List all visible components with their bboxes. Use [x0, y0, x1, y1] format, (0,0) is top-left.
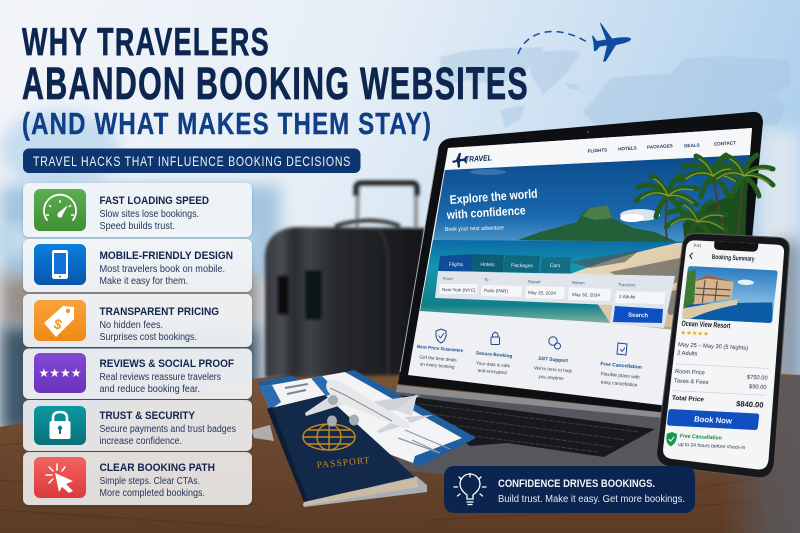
price breakdown: $750.00: [747, 375, 768, 382]
phone screen: [661, 240, 793, 470]
card: transparent pricing: TRANSPARENT PRICING: [100, 306, 219, 318]
search form: May 30, 2024: [572, 292, 600, 298]
title: WHY TRAVELERS: [22, 21, 270, 64]
search form: Return: [572, 280, 585, 285]
resort name and rating: [680, 319, 731, 339]
card: transparent pricing: No hidden fees.: [100, 320, 163, 331]
search form: To: [484, 277, 489, 282]
world map: [440, 47, 790, 128]
search button: Search: [628, 313, 648, 319]
website header: TRAVEL: [465, 153, 492, 164]
search form: May 25, 2024: [528, 290, 556, 296]
hero text: Book your next adventure: [445, 225, 504, 233]
hero text: Explore the world: [449, 187, 538, 207]
feature: 24/7 support: [534, 337, 573, 381]
search form: Depart: [528, 279, 542, 284]
feature: free cancellation: Flexible plans with: [600, 371, 640, 381]
phone: [654, 232, 800, 478]
card: fast loading speed: Speed builds trust.: [100, 221, 175, 232]
card: transparent pricing: Surprises cost bookings.: [100, 332, 197, 343]
icon: smartphone: [34, 244, 86, 285]
hero text: with confidence: [445, 203, 526, 222]
laptop: [392, 112, 773, 474]
icon: price tag: $: [52, 315, 64, 333]
callout: confidence drives bookings: Build trust. Make it easy. Get more bookings.: [498, 494, 685, 505]
subtitle banner: TRAVEL HACKS THAT INFLUENCE BOOKING DECISIONS: [33, 154, 351, 169]
feature: free cancellation: Free Cancellation: [600, 361, 642, 371]
card: fast loading speed: [23, 183, 252, 237]
card: clear booking path: More completed bookings.: [100, 488, 205, 499]
hero text: [445, 187, 538, 233]
search form: Paris (PAR): [484, 288, 508, 294]
stay details: May 25 – May 30 (5 Nights): [678, 342, 748, 352]
price breakdown: [671, 364, 769, 410]
stay details: 2 Adults: [677, 350, 698, 358]
card: mobile-friendly design: Make it easy for them.: [100, 276, 188, 287]
card: reviews and social proof: Real reviews reassure travelers: [100, 372, 221, 383]
title: ABANDON BOOKING WEBSITES: [22, 58, 529, 109]
website header: HOTELS: [618, 145, 637, 152]
passport: [251, 395, 427, 507]
search button: [613, 306, 663, 323]
passport globe emblem: [303, 424, 355, 450]
suitcase: [265, 183, 425, 378]
card: mobile-friendly design: Most travelers book on mobile.: [100, 264, 225, 275]
free cancellation note: up to 24 hours before check-in: [678, 442, 746, 451]
icon: price tag: [34, 300, 86, 341]
price breakdown: $90.00: [749, 384, 767, 391]
card: trust and security: TRUST & SECURITY: [100, 410, 195, 422]
feature: 24/7 support: We're here to help: [534, 365, 573, 374]
stay details: [677, 342, 748, 360]
icon: airplane with dashed flight path: [518, 22, 631, 62]
toy airplane model: [305, 380, 433, 433]
title: (AND WHAT MAKES THEM STAY): [22, 106, 432, 141]
palm trees: [636, 155, 773, 246]
feature: secure booking: Your data is safe: [476, 361, 511, 369]
phone: 9:41: [693, 243, 701, 248]
search form: [435, 271, 675, 328]
search tabs: Hotels: [480, 262, 495, 268]
resort name and rating: ★★★★★: [680, 329, 709, 338]
search tabs: Cars: [550, 263, 561, 269]
card: reviews and social proof: [23, 348, 252, 399]
wooden table: [0, 358, 800, 533]
callout: confidence drives bookings: CONFIDENCE DRIVES BOOKINGS.: [498, 478, 655, 490]
card: transparent pricing: [23, 294, 252, 347]
icon: padlock: [34, 406, 86, 445]
price breakdown: $840.00: [736, 399, 764, 410]
feature: secure booking: [476, 332, 513, 375]
resort photo: [682, 266, 778, 323]
hero image: beach and mountain: [420, 155, 773, 330]
search form: New York (NYC): [442, 287, 476, 293]
icon: light bulb: [454, 474, 486, 504]
card: reviews and social proof: and reduce booking fear.: [100, 384, 200, 395]
feature: secure booking: Secure Booking: [476, 350, 513, 360]
icon: rating stars: ★★★★: [38, 366, 82, 380]
booking summary header: [689, 253, 755, 263]
search form: From: [443, 276, 453, 281]
price breakdown: Room Price: [675, 369, 705, 377]
feature: best price guarantee: Get the best deals: [419, 354, 458, 363]
card: fast loading speed: FAST LOADING SPEED: [100, 195, 209, 207]
subtitle banner: [23, 148, 360, 173]
search tabs: Flights: [449, 262, 464, 268]
icon: speedometer: [34, 189, 86, 231]
icon: rating stars: [34, 353, 86, 393]
website header: CONTACT: [714, 140, 736, 147]
website header: FLIGHTS: [587, 147, 607, 154]
card: mobile-friendly design: MOBILE-FRIENDLY DESIGN: [100, 250, 233, 262]
passport label: PASSPORT: [316, 456, 370, 471]
laptop base and keyboard: [392, 386, 700, 474]
card: trust and security: [23, 400, 252, 451]
boarding passes: [258, 370, 476, 466]
feature: 24/7 support: 24/7 Support: [538, 356, 568, 364]
price breakdown: Taxes & Fees: [674, 378, 709, 386]
website header: PACKAGES: [647, 143, 673, 150]
laptop screen: [408, 128, 773, 413]
resort name and rating: Ocean View Resort: [681, 319, 731, 330]
laptop lid frame: [398, 112, 763, 420]
card: clear booking path: Simple steps. Clear CTAs.: [100, 476, 200, 487]
booking summary header: Booking Summary: [711, 254, 755, 263]
card: clear booking path: CLEAR BOOKING PATH: [100, 462, 215, 474]
feature: secure booking: and encrypted: [477, 368, 507, 375]
website header: [445, 128, 752, 170]
free cancellation note: Free Cancellation: [680, 434, 723, 442]
feature: best price guarantee: Best Price Guarantee: [417, 344, 464, 353]
feature: 24/7 support: you anytime: [538, 374, 564, 381]
card: clear booking path: [23, 452, 252, 505]
card: mobile-friendly design: [23, 239, 252, 292]
feature: best price guarantee: [417, 329, 464, 370]
price breakdown: Total Price: [672, 395, 705, 403]
book now button: [667, 409, 759, 430]
card: fast loading speed: Slow sites lose bookings.: [100, 209, 199, 220]
free cancellation note: [665, 432, 747, 451]
phone notch: [714, 241, 758, 252]
search tabs: Packages: [511, 263, 534, 269]
card: trust and security: Secure payments and trust badges: [100, 424, 236, 435]
icon: cursor click: [34, 457, 86, 498]
feature: best price guarantee: on every booking: [419, 361, 455, 370]
search form: Travelers: [618, 282, 635, 287]
search form: 2 Adults: [619, 294, 636, 299]
callout: confidence drives bookings: [444, 466, 695, 513]
book now button: Book Now: [694, 415, 733, 426]
website header: DEALS: [684, 143, 700, 148]
title: [22, 21, 529, 141]
feature: free cancellation: easy cancellation: [600, 379, 638, 389]
card: trust and security: increase confidence.: [100, 436, 182, 447]
phone frame: [654, 232, 800, 478]
feature: free cancellation: [600, 343, 642, 389]
card: reviews and social proof: REVIEWS & SOCIAL PROOF: [100, 358, 234, 370]
search tabs: [438, 254, 571, 273]
